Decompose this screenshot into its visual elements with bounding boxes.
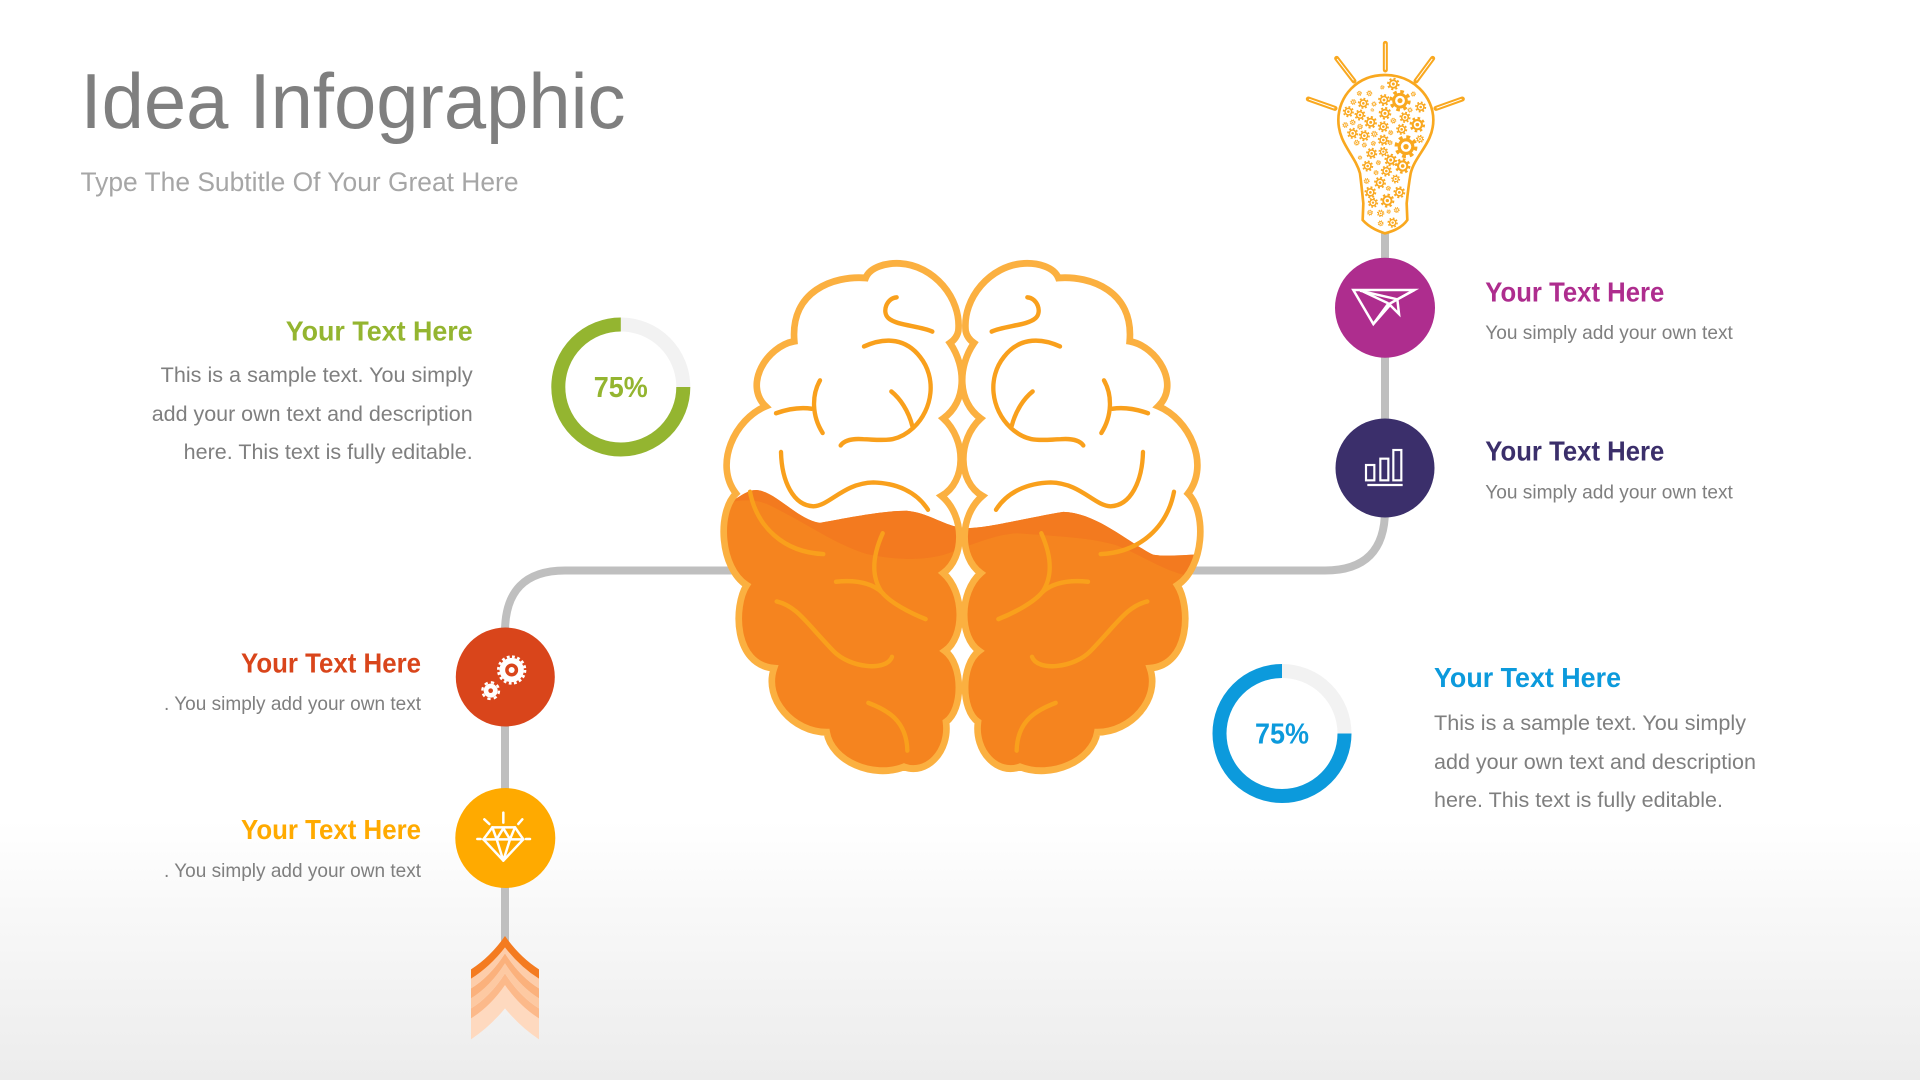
brain illustration (717, 263, 1210, 793)
icon: paper plane (1353, 290, 1414, 324)
brain left folds (750, 297, 932, 751)
donut chart: green 75%: 75% (594, 372, 648, 404)
icon: diamond (477, 813, 530, 861)
red circle with gears icon (456, 628, 555, 726)
bulb outline (1338, 75, 1433, 233)
panel: green text block: Your Text Here (286, 316, 473, 346)
panel: red label: . You simply add your own text (164, 693, 422, 715)
brain right hemisphere outline (962, 263, 1200, 771)
panel: red label (164, 648, 422, 715)
brain right folds (992, 297, 1174, 751)
purple circle with paper plane icon (1335, 258, 1435, 358)
panel: purple label (1485, 276, 1733, 344)
panel: purple label: You simply add your own text (1485, 322, 1733, 344)
brain orange fill level (727, 490, 1194, 768)
panel: navy label: You simply add your own text (1485, 482, 1733, 504)
panel: blue text block: Your Text Here (1434, 662, 1621, 693)
panel: blue text block: here. This text is fully editable. (1434, 788, 1723, 812)
subtitle: Type The Subtitle Of Your Great Here (80, 167, 518, 197)
panel: navy label: Your Text Here (1485, 436, 1664, 466)
brain darker fluid band (730, 490, 1210, 577)
donut chart: green 75% (558, 324, 683, 450)
panel: yellow label: Your Text Here (241, 814, 421, 845)
yellow circle with diamond icon (455, 788, 555, 888)
panel: yellow label (164, 814, 422, 882)
panel: green text block (152, 316, 473, 464)
panel: green text block: This is a sample text. You simply (161, 363, 473, 387)
navy circle with bar chart icon (1336, 418, 1434, 518)
panel: blue text block: This is a sample text. You simply (1434, 711, 1746, 735)
panel: green text block: here. This text is fully editable. (184, 440, 473, 464)
right connector line (1190, 225, 1385, 570)
icon: bar chart (1366, 450, 1403, 485)
panel: blue text block (1434, 662, 1756, 812)
arrow tail chevrons (471, 936, 539, 1039)
brain left hemisphere outline (724, 263, 962, 771)
title: Idea Infographic (80, 57, 626, 145)
panel: yellow label: . You simply add your own text (164, 860, 422, 882)
panel: green text block: add your own text and description (152, 402, 473, 426)
panel: purple label: Your Text Here (1485, 276, 1664, 308)
panel: blue text block: add your own text and description (1434, 750, 1756, 774)
panel: red label: Your Text Here (241, 648, 421, 678)
left connector line (505, 570, 735, 945)
panel: navy label (1485, 436, 1733, 504)
donut chart: blue 75% (1220, 671, 1344, 796)
bulb rays (1308, 43, 1462, 108)
icon: light bulb with gears (1308, 43, 1462, 233)
bulb gears (1343, 79, 1425, 227)
icon: gears (482, 657, 525, 699)
donut chart: blue 75%: 75% (1255, 718, 1309, 750)
